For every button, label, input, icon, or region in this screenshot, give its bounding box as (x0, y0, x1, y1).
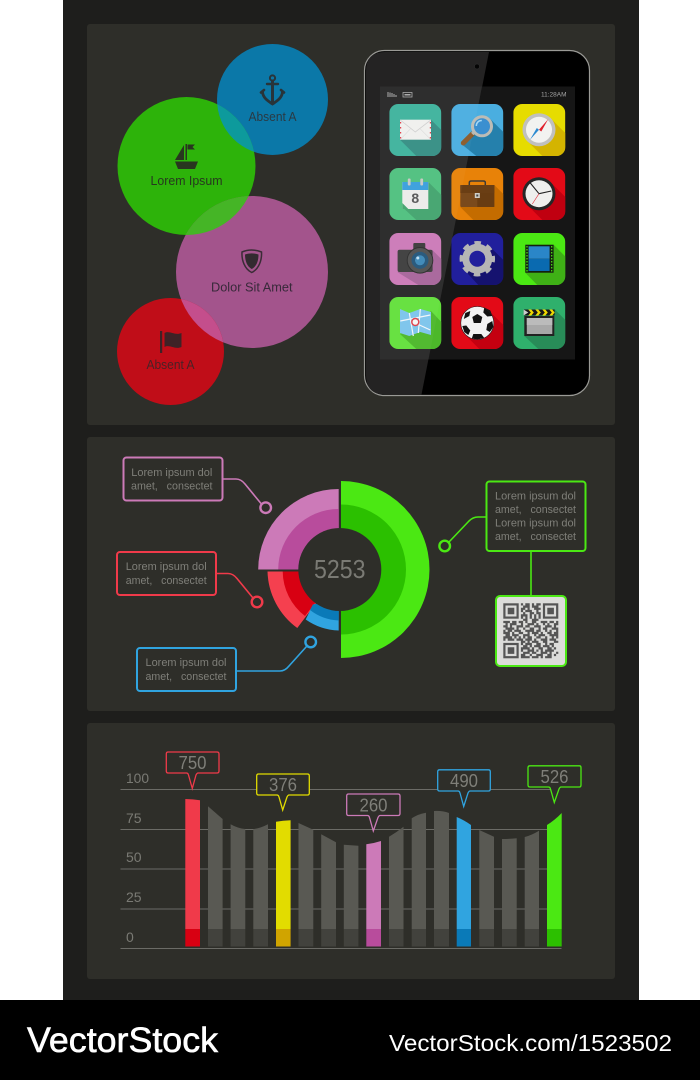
segment: red (268, 572, 340, 628)
footer logo: VectorStock (27, 1021, 219, 1060)
label: Absent A: Absent A (146, 358, 195, 372)
value callout: 750: 750 (178, 753, 206, 773)
axis labels: 25 (126, 889, 142, 905)
axis labels: 0 (126, 929, 134, 945)
callout: red: Lorem ipsum dol (126, 561, 207, 573)
bubble: pink (176, 196, 328, 348)
value callout: 376: 376 (269, 775, 297, 795)
segment: green (341, 481, 430, 658)
icon: shield (242, 250, 262, 272)
dark page background (63, 0, 639, 1000)
callout: green: Lorem ipsum dol (495, 490, 576, 502)
screen glare (380, 86, 482, 360)
value callout: 260: 260 (360, 796, 388, 816)
app icon: compass (513, 104, 565, 156)
status bar: 11:28AM (541, 92, 566, 98)
icon: anchor (261, 75, 284, 104)
app icon: briefcase (451, 168, 503, 220)
value callout: 490: 490 (450, 771, 478, 791)
app icon: search (451, 104, 503, 156)
bar chart (185, 799, 562, 946)
app icon: calendar (389, 168, 441, 220)
callout: pink: amet, consectet (131, 480, 212, 492)
callout: green: amet, consectet (495, 504, 576, 516)
bar: red (185, 799, 200, 946)
app icon: calendar: 8 (411, 190, 419, 206)
bars: grey group 1 (208, 806, 268, 946)
label: Lorem Ipsum: Lorem Ipsum (150, 174, 222, 188)
axis labels: 75 (126, 810, 142, 826)
value callout: 490 (438, 770, 490, 806)
QR code (496, 596, 566, 666)
callout: blue (137, 637, 316, 691)
icon: flag (160, 331, 182, 353)
panel: bar chart (87, 723, 615, 979)
value callout: 376 (257, 774, 309, 810)
axis labels: 100 (126, 770, 149, 786)
donut chart (258, 481, 430, 658)
bar: pink (366, 841, 381, 946)
callout: red: amet, consectet (126, 575, 207, 587)
app icon: football (451, 297, 503, 349)
tablet (364, 50, 590, 396)
callout: blue: amet, consectet (146, 671, 226, 683)
axis labels (126, 770, 149, 945)
app icon: mail (389, 104, 441, 156)
total value: 5253 (314, 554, 366, 584)
callout: green (439, 482, 586, 596)
callout: green: amet, consectet (495, 531, 576, 543)
footer band (0, 1000, 700, 1080)
bars: grey group 3 (389, 811, 449, 946)
callout: pink (124, 458, 271, 513)
bar: blue (457, 817, 471, 946)
app icon: camera (389, 233, 441, 285)
panel: bubbles and tablet (87, 24, 615, 425)
icon: sailboat (175, 144, 198, 169)
app icon: film (513, 233, 565, 285)
label: Dolor Sit Amet: Dolor Sit Amet (211, 280, 293, 294)
bar: green (547, 813, 562, 946)
callout: pink: Lorem ipsum dol (131, 467, 212, 479)
bar: yellow (276, 820, 291, 946)
bubble: red (117, 298, 224, 405)
app icon: clapperboard (513, 297, 565, 349)
app icon: gear (451, 233, 503, 285)
bubble: green (118, 97, 256, 235)
footer url: VectorStock.com/1523502 (389, 1030, 672, 1056)
value callout: 260 (347, 794, 400, 831)
value callout: 526: 526 (540, 767, 568, 787)
value callout: 526 (528, 766, 581, 802)
label: Absent A: Absent A (248, 110, 297, 124)
app icon: map (389, 297, 441, 349)
bars: grey group 4 (479, 830, 539, 946)
segment: pink (258, 489, 339, 570)
status bar (388, 92, 566, 98)
app icon: clock (513, 168, 565, 220)
panel: donut chart (87, 437, 615, 711)
callout: green: Lorem ipsum dol (495, 518, 576, 530)
tablet screen (380, 86, 575, 360)
value callout: 750 (166, 752, 219, 788)
axis labels: 50 (126, 849, 142, 865)
callout: red (117, 552, 262, 607)
callout: blue: Lorem ipsum dol (146, 657, 226, 669)
bars: grey group 2 (298, 823, 358, 946)
segment: blue (306, 600, 339, 630)
bubble: blue (217, 44, 328, 155)
